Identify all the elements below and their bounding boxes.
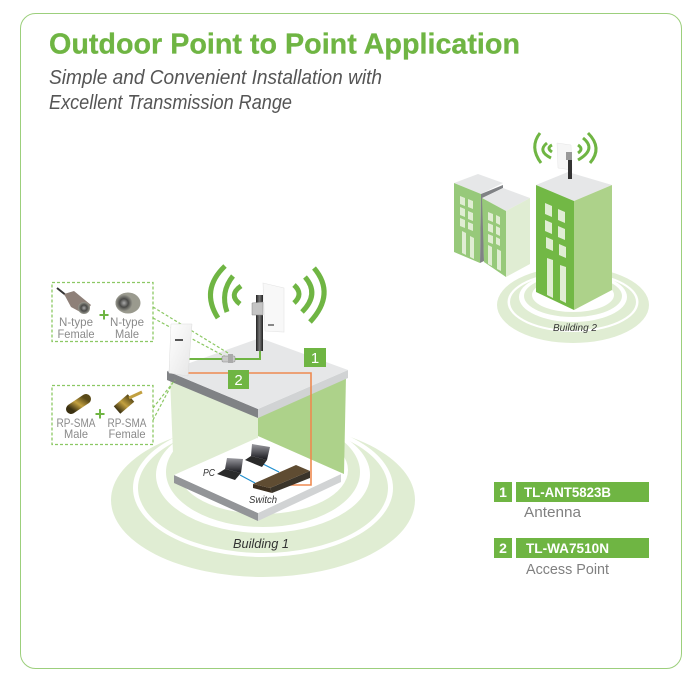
icon: RP-SMA male connector	[71, 399, 86, 409]
legend item 1	[494, 482, 649, 521]
inline connector	[222, 354, 235, 363]
icon: RP-SMA female connector	[117, 392, 142, 410]
network switch	[253, 465, 310, 493]
badge 1 on roof	[304, 348, 326, 367]
ethernet cables blue	[240, 464, 279, 483]
labels: N-type: N-type	[59, 315, 93, 329]
legend item 2: TL-WA7510N	[526, 540, 609, 556]
dashed lines: N-type callout	[153, 307, 228, 357]
building 2 scene	[454, 133, 649, 343]
label: building 2: Building 2	[553, 322, 597, 334]
legend item 2	[494, 538, 649, 578]
labels: N-type	[58, 315, 144, 341]
legend item 2: 2	[499, 540, 507, 556]
plus sign: +	[99, 305, 109, 325]
outdoor antenna	[252, 283, 284, 351]
front small building	[482, 188, 530, 277]
badge 1 on roof: 1	[311, 350, 319, 367]
labels: RP-SMA: RP-SMA	[108, 416, 146, 430]
labels: N-type: N-type	[110, 315, 144, 329]
callout: RP-SMA connectors	[52, 386, 153, 444]
icon: N-type male connector	[116, 292, 140, 314]
walls	[170, 376, 346, 478]
signal arcs: building 2	[535, 133, 596, 163]
badge 2 on roof	[228, 370, 249, 389]
orange ethernet cable	[186, 373, 311, 485]
green antenna cable	[188, 351, 260, 359]
labels: RP-SMA: Female	[108, 427, 146, 441]
label: switch: Switch	[249, 494, 277, 506]
legend item 2: Access Point	[526, 562, 609, 578]
roof slab	[167, 338, 348, 418]
floor	[174, 438, 341, 521]
labels: RP-SMA: Male	[64, 427, 88, 441]
title: Outdoor Point to Point Application	[49, 28, 520, 60]
antenna: building 2	[557, 143, 572, 179]
label: building 1: Building 1	[233, 537, 289, 551]
badge 2 on roof: 2	[234, 372, 243, 389]
plus sign: +	[95, 404, 105, 424]
laptop: PC rear	[245, 444, 270, 467]
legend item 1: Antenna	[524, 505, 582, 521]
subtitle: Excellent Transmission Range	[49, 92, 292, 114]
callout: N-type connectors	[52, 282, 153, 342]
access point	[169, 324, 192, 376]
labels: RP-SMA: RP-SMA	[56, 416, 96, 430]
legend item 1: TL-ANT5823B	[524, 484, 611, 500]
labels: N-type: Male	[115, 327, 139, 341]
rear building	[454, 174, 503, 263]
dashed lines: RP-SMA callout	[153, 380, 175, 420]
icon: N-type female connector	[57, 288, 91, 314]
subtitle: Simple and Convenient Installation with	[49, 67, 382, 89]
subtitle	[49, 67, 382, 114]
label: PC: PC	[203, 468, 216, 479]
building 1 scene	[111, 266, 415, 577]
main building 2	[536, 172, 612, 310]
signal rings: building 2	[497, 267, 649, 343]
laptop: PC front	[217, 458, 243, 480]
labels: RP-SMA	[56, 416, 146, 441]
signal rings: building 1	[111, 417, 415, 577]
labels: N-type: Female	[58, 327, 95, 341]
legend item 1: 1	[499, 484, 507, 500]
signal arcs: building 1	[210, 266, 324, 322]
